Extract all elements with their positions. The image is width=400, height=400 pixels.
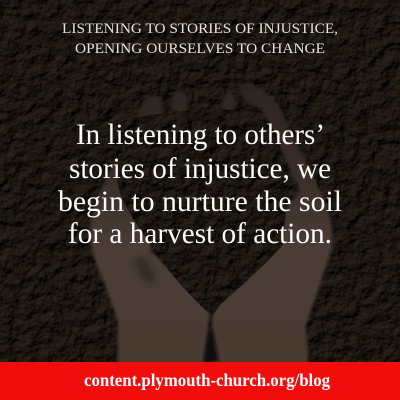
footer url: content.plymouth-church.org/blog — [84, 370, 330, 390]
main quote — [58, 118, 342, 250]
main quote: begin to nurture the soil — [58, 185, 342, 218]
left hand — [90, 95, 210, 364]
title: OPENING OURSELVES TO CHANGE — [75, 41, 325, 57]
main quote: stories of injustice, we — [69, 152, 331, 185]
main quote: for a harvest of action. — [68, 217, 332, 250]
footer bar — [0, 362, 400, 400]
left fingertip — [172, 91, 188, 115]
gap between wrists — [203, 328, 219, 362]
title: LISTENING TO STORIES OF INJUSTICE, — [62, 21, 338, 37]
right hand — [212, 83, 332, 364]
soil dust on left palm — [131, 254, 159, 286]
cupped hands photo — [89, 82, 334, 362]
soil mound — [115, 110, 286, 316]
right fingertip — [222, 94, 236, 112]
title — [62, 21, 338, 57]
main quote: In listening to others’ — [76, 118, 325, 151]
